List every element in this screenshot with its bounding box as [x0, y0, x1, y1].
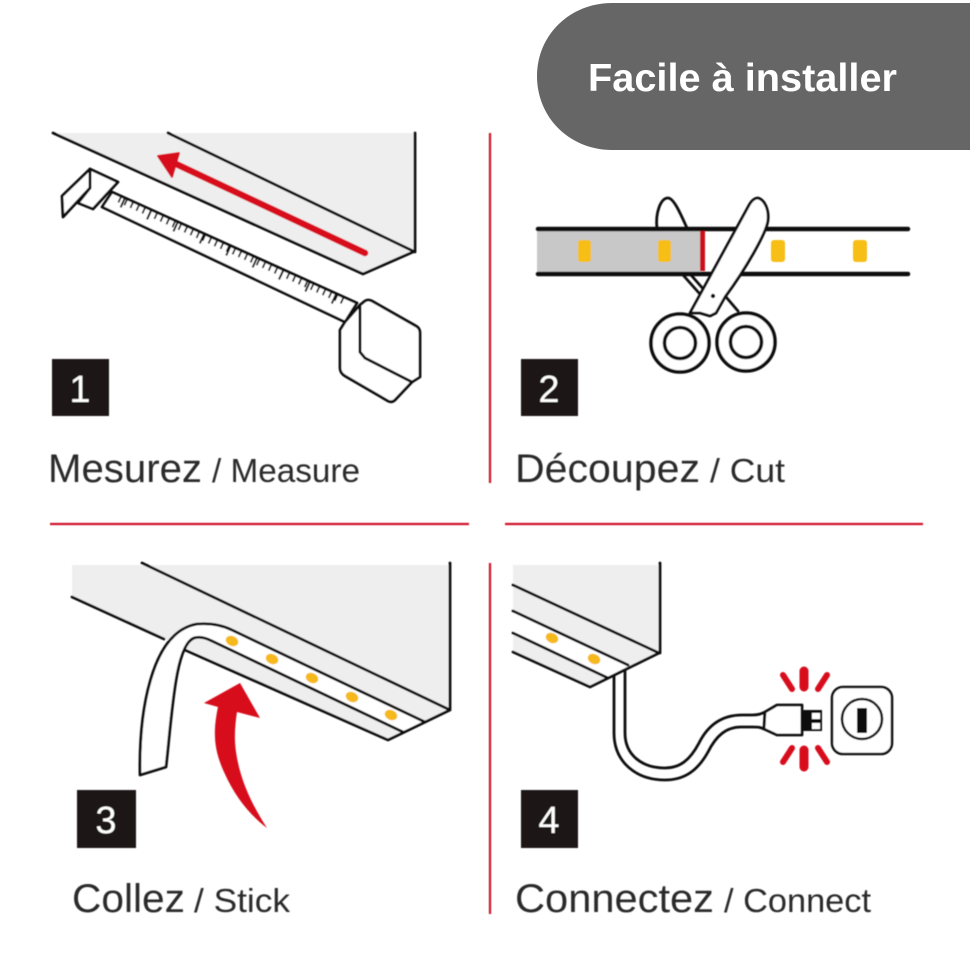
panel: step 1 measure	[48, 133, 420, 491]
number badge 2	[521, 359, 578, 416]
label: Connectez / Connect: / Connect	[724, 882, 871, 919]
label: Connectez / Connect	[515, 877, 871, 921]
icon: cable and plug	[614, 671, 822, 780]
icon: scissors	[651, 198, 775, 372]
illustration: under-cabinet surface	[53, 133, 415, 274]
arrow: measuring direction	[158, 153, 365, 253]
label: Mesurez / Measure	[48, 447, 360, 491]
arrow: press upward	[204, 683, 267, 828]
badge: Facile à installer: Facile à installer	[588, 57, 897, 100]
label: Découpez / Cut: Découpez	[515, 447, 700, 491]
label: Découpez / Cut	[515, 447, 785, 491]
illustration: cabinet with strip	[513, 563, 660, 687]
label: Mesurez / Measure: / Measure	[212, 452, 360, 489]
illustrated steps	[48, 133, 923, 921]
number badge 4	[521, 790, 578, 848]
icon: tape measure	[62, 169, 420, 402]
label: Découpez / Cut: / Cut	[710, 452, 785, 489]
illustration: cabinet with applied strip	[72, 563, 450, 740]
number badge 3: 3	[95, 800, 117, 842]
label: Mesurez / Measure: Mesurez	[48, 447, 202, 491]
number badge 2: 2	[538, 369, 560, 411]
badge: Facile à installer	[537, 3, 970, 150]
number badge 1: 1	[69, 369, 91, 411]
illustration: LED strip	[537, 229, 908, 274]
number badge 1	[52, 359, 109, 416]
label: Collez / Stick	[72, 877, 291, 921]
icon: wall socket	[832, 687, 892, 754]
icon: peeled strip end	[140, 623, 425, 775]
label: Collez / Stick: Collez	[72, 877, 185, 921]
number badge 3	[77, 790, 136, 848]
label: Collez / Stick: / Stick	[194, 882, 291, 919]
panel: step 4 connect	[513, 563, 892, 921]
panel: step 2 cut	[515, 198, 908, 491]
label: Connectez / Connect: Connectez	[515, 877, 714, 921]
panel: step 3 stick	[72, 563, 450, 921]
icon: spark rays	[783, 671, 827, 767]
number badge 4: 4	[538, 800, 560, 842]
